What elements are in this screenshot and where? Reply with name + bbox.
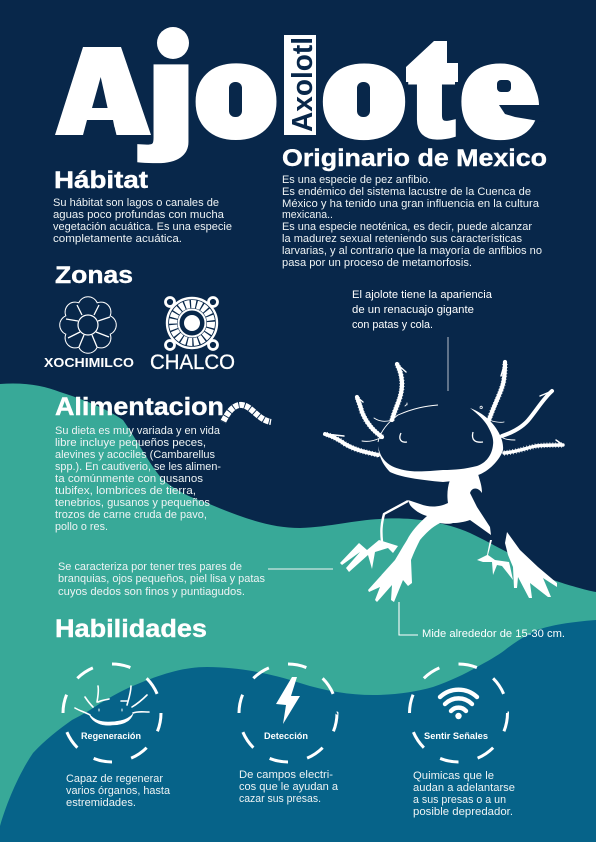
callout: body features: branquias, ojos pequeños, piel lisa y patas bbox=[58, 573, 265, 585]
text: regeneración description: Capaz de regenerar bbox=[66, 773, 163, 785]
text: detección description bbox=[239, 769, 338, 805]
rear right foot and tail bbox=[505, 532, 557, 598]
letter e: e bbox=[463, 27, 535, 159]
text: origin description: la madurez sexual reteniendo sus características bbox=[282, 233, 522, 245]
text: origin description: Es una especie de pez anfibio. bbox=[282, 174, 431, 186]
wave: blue bbox=[0, 620, 596, 842]
icon: worm bbox=[223, 405, 271, 422]
text: regeneración description: estremidades. bbox=[66, 797, 136, 809]
head outline bbox=[378, 405, 438, 442]
text: origin description bbox=[282, 174, 542, 269]
logo: Chalco: CHALCO bbox=[150, 351, 235, 374]
icon: wifi bbox=[440, 690, 477, 719]
dashed ring bbox=[410, 664, 508, 762]
text: origin description: Es una especie neoténica, es decir, puede alcanzar bbox=[282, 221, 532, 233]
text: diet description: alevines y acociles (Cambarellus bbox=[55, 449, 215, 461]
text: origin description: larvarias, y al contrario que la mayoría de anfibios no bbox=[282, 245, 542, 257]
letter A: A bbox=[61, 31, 145, 153]
logo: Xochimilco bbox=[44, 297, 134, 370]
text: sentir señales description bbox=[413, 770, 515, 818]
text: diet description: Su dieta es muy variada y en vida bbox=[55, 425, 220, 437]
letter j: j bbox=[141, 21, 197, 161]
heading: Alimentacion: Alimentacion bbox=[55, 393, 224, 421]
front left foot bbox=[340, 540, 398, 572]
callout: appearance: con patas y cola. bbox=[352, 319, 433, 331]
front left arm bbox=[381, 501, 408, 542]
dashed ring bbox=[63, 664, 161, 762]
text: detección description: cos que le ayudan a bbox=[239, 781, 338, 793]
icon: sun disc bbox=[166, 298, 218, 350]
text: habitat description: aguas poco profundas con mucha bbox=[53, 209, 224, 221]
text: regeneración description bbox=[66, 773, 170, 809]
text: detección description: De campos electri- bbox=[239, 769, 333, 781]
gills bbox=[325, 362, 563, 455]
callout: body features: cuyos dedos son finos y puntiagudos. bbox=[58, 586, 245, 598]
dashed ring bbox=[239, 664, 337, 762]
callout: size: Mide alrededor de 15-30 cm. bbox=[422, 628, 565, 640]
callout: appearance bbox=[352, 289, 492, 391]
wave: teal bbox=[0, 383, 596, 842]
text: habitat description: completamente acuática. bbox=[53, 233, 182, 245]
text: sentir señales description: a sus presas o a un bbox=[413, 794, 506, 806]
text: origin description: mexicana.. bbox=[282, 209, 333, 221]
letter o: o bbox=[324, 27, 404, 159]
text: diet description: trozos de carne cruda de pavo, bbox=[55, 509, 207, 521]
callout: appearance: El ajolote tiene la apariencia bbox=[352, 289, 492, 301]
text: diet description: tenebrios, gusanos y pequeños bbox=[55, 497, 210, 509]
head crescent bbox=[378, 408, 503, 482]
callout: size bbox=[399, 602, 565, 640]
heading: Hábitat: Hábitat bbox=[54, 167, 148, 194]
icon: small axolotl bbox=[75, 686, 149, 725]
text: regeneración description: varios órganos, hasta bbox=[66, 785, 170, 797]
title: Ajolote bbox=[55, 21, 545, 161]
letter o: o bbox=[197, 27, 275, 159]
icon: flower bbox=[60, 297, 116, 353]
skill: regeneración: Regeneración bbox=[81, 731, 141, 741]
text: origin description: Es endémico del sistema lacustre de la Cuenca de bbox=[282, 186, 531, 198]
text: habitat description: vegetación acuática. Es una especie bbox=[53, 221, 232, 233]
callout: body features: Se caracteriza por tener tres pares de bbox=[58, 561, 242, 573]
text: diet description bbox=[55, 425, 221, 533]
text: diet description: spp.). En cautiverio, se les alimen- bbox=[55, 461, 221, 473]
skill: detección bbox=[239, 664, 337, 762]
icon: lightning bolt bbox=[276, 677, 300, 724]
text: detección description: cazar sus presas. bbox=[239, 793, 321, 805]
skill: detección: Detección bbox=[264, 731, 308, 741]
text: sentir señales description: posible depredador. bbox=[413, 806, 513, 818]
text: diet description: ta comúnmente con gusanos bbox=[55, 473, 203, 485]
heading: Habilidades: Habilidades bbox=[55, 615, 207, 643]
letter t: t bbox=[410, 23, 454, 161]
skill: regeneración bbox=[63, 664, 161, 762]
illustration: axolotl bbox=[325, 362, 563, 602]
skill: sentir señales bbox=[410, 664, 508, 762]
text: origin description: México y ha tenido una gran influencia en la cultura bbox=[282, 198, 539, 210]
callout: appearance: de un renacuajo gigante bbox=[352, 304, 474, 316]
eyes bbox=[400, 432, 483, 442]
callout: body features bbox=[58, 561, 333, 598]
heading: Zonas: Zonas bbox=[55, 262, 133, 289]
heading: Originario de Mexico: Originario de Mexico bbox=[282, 145, 547, 172]
logo: Chalco bbox=[150, 298, 235, 374]
right leg bbox=[477, 540, 513, 580]
text: diet description: libre incluye pequeños peces, bbox=[55, 437, 206, 449]
text: origin description: pasa por un proceso de metamorfosis. bbox=[282, 257, 472, 269]
text: diet description: pollo o res. bbox=[55, 521, 108, 533]
text: habitat description bbox=[53, 197, 232, 245]
torso and big rear leg bbox=[368, 474, 491, 602]
text: habitat description: Su hábitat son lagos o canales de bbox=[53, 197, 219, 209]
text: sentir señales description: audan a adelantarse bbox=[413, 782, 515, 794]
logo: Xochimilco: XOCHIMILCO bbox=[44, 356, 134, 370]
text: sentir señales description: Quimicas que le bbox=[413, 770, 494, 782]
skill: sentir señales: Sentir Señales bbox=[424, 731, 488, 741]
text: diet description: tubifex, lombrices de tierra, bbox=[55, 485, 196, 497]
label box: Axolotl: Axolotl bbox=[287, 37, 319, 132]
